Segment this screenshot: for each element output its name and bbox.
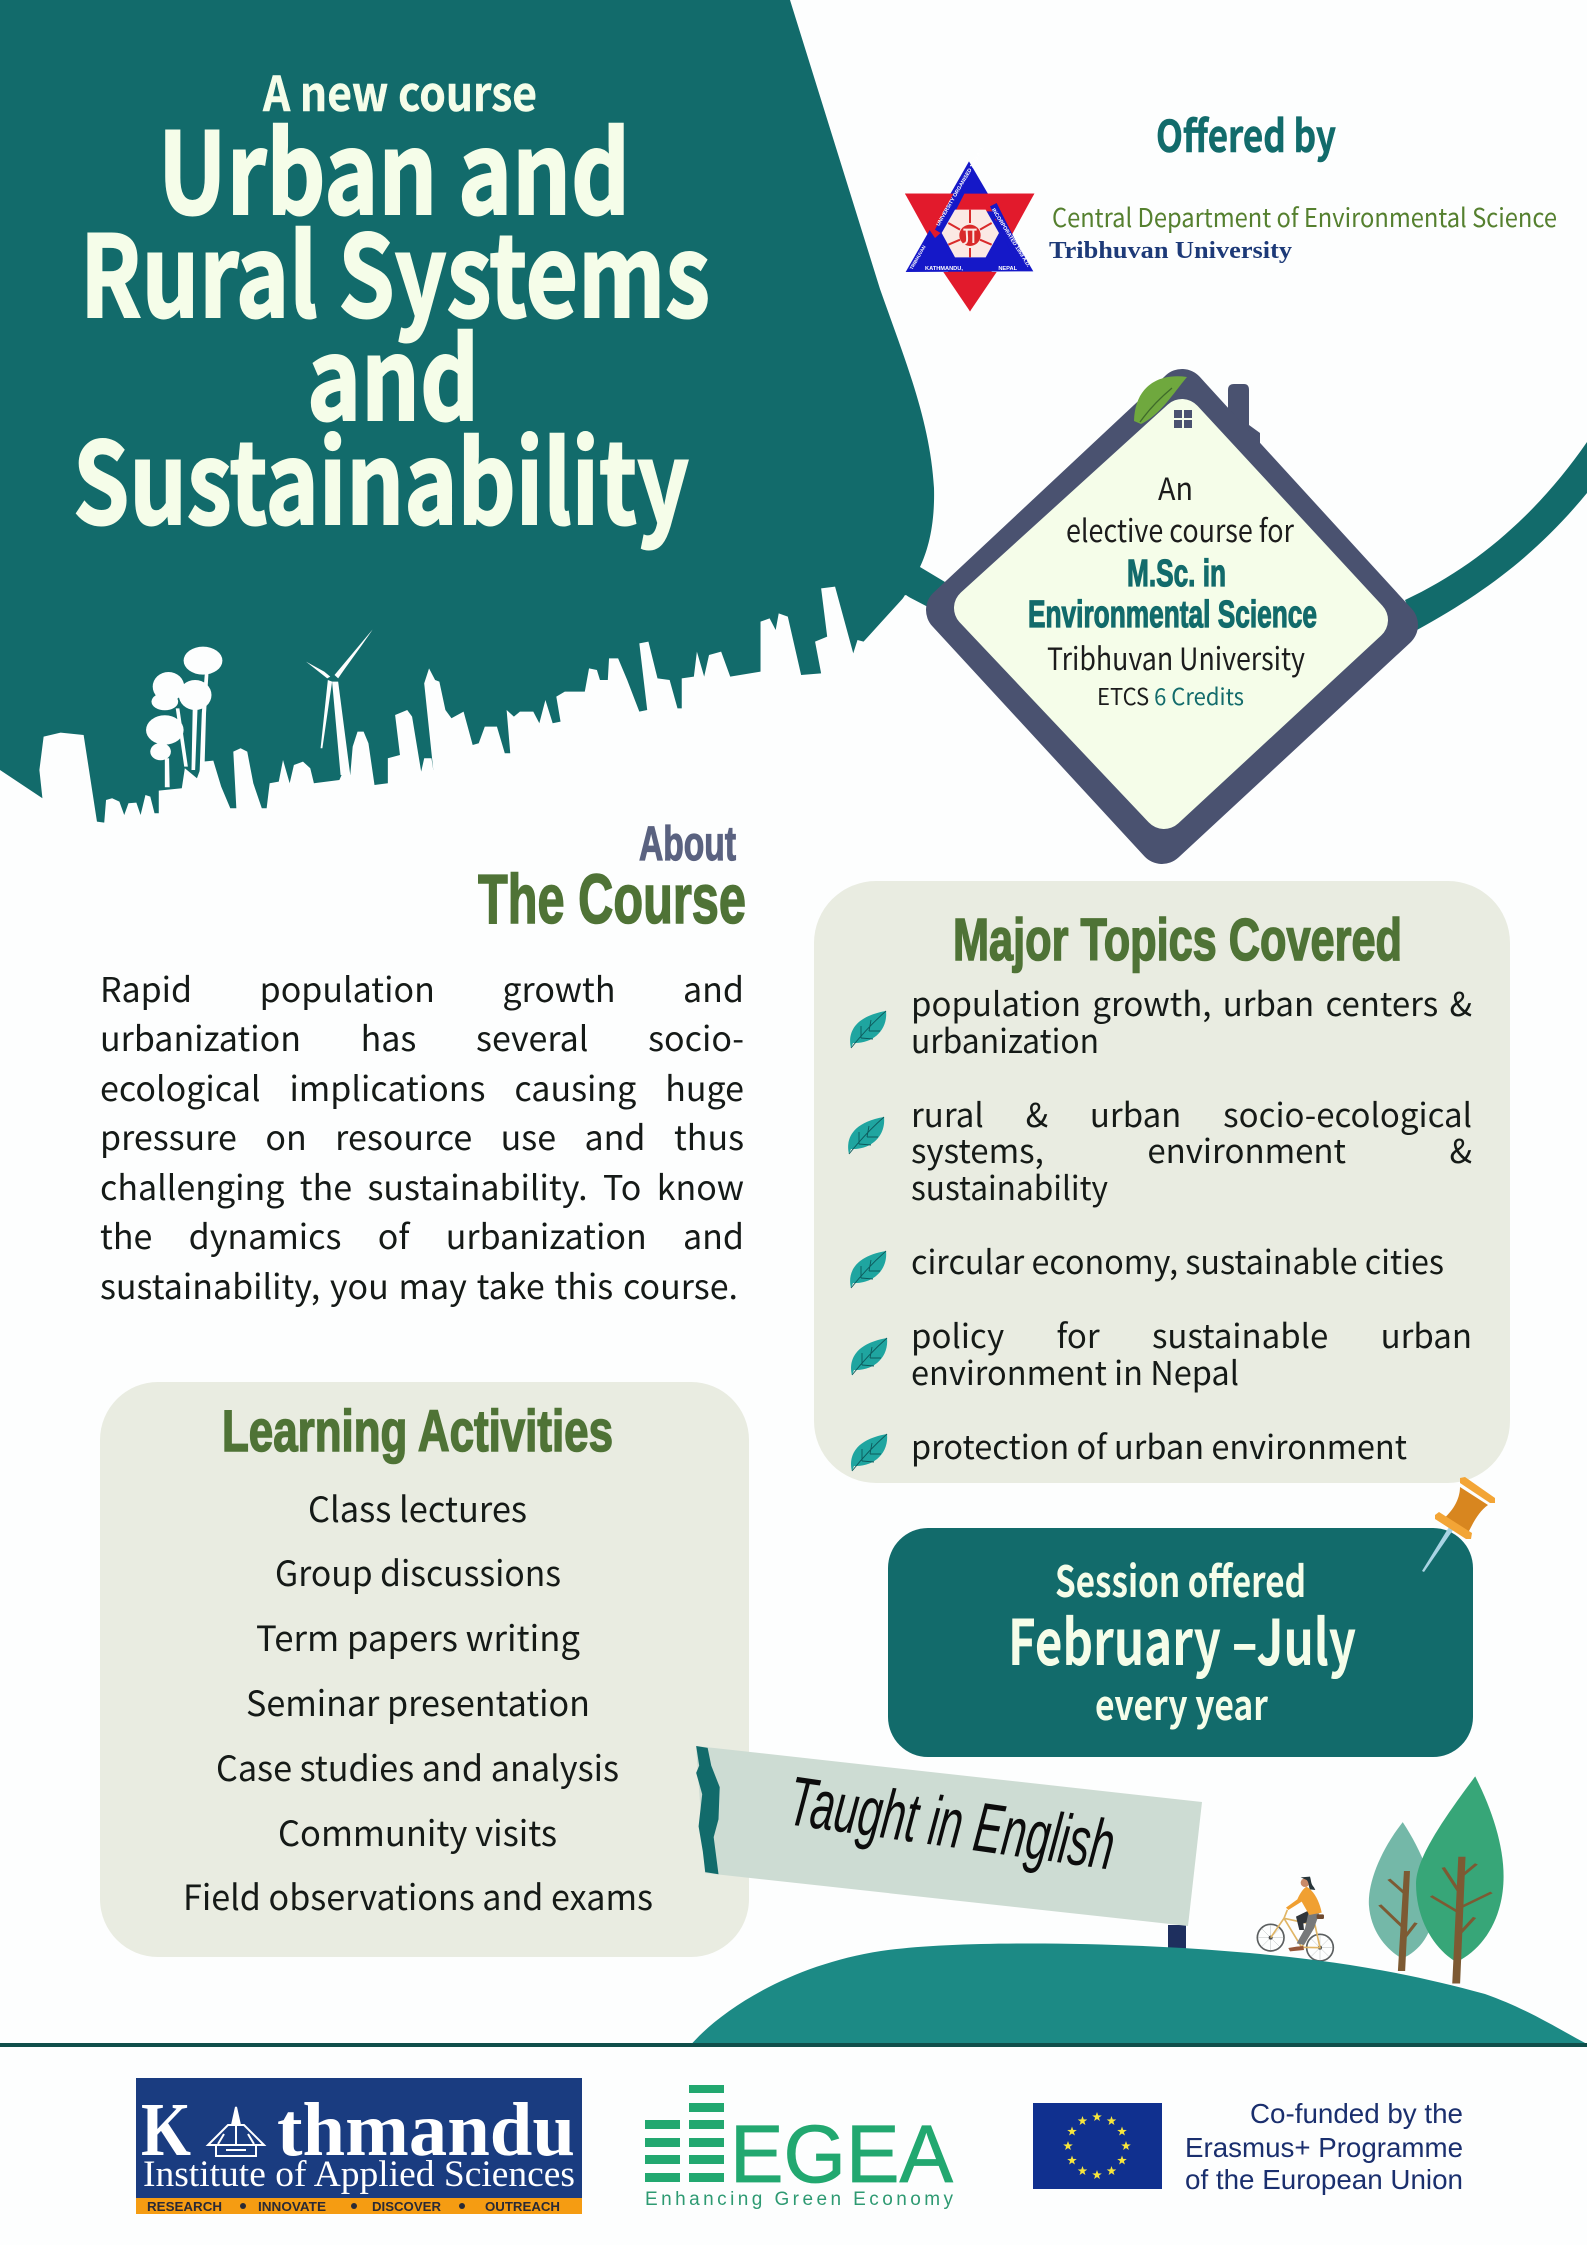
logo: Kathmandu Institute of Applied Sciences: K: [141, 2088, 191, 2172]
chimney: [1228, 384, 1260, 455]
logo: Kathmandu Institute of Applied Sciences: Institute of Applied Sciences: [143, 2154, 575, 2195]
session offered text: [1008, 1548, 1356, 1732]
leaf on roof: [1134, 376, 1187, 424]
learning activities list: [183, 1482, 653, 1921]
topic 1: urbanization: [911, 1015, 1099, 1063]
session offered text: Session offered: [1055, 1548, 1306, 1610]
leaf bullet 2: [848, 1117, 884, 1154]
house shaped badge: [950, 376, 1394, 840]
about the course paragraph: sustainability, you may take this course.: [100, 1260, 738, 1309]
icon: cyclist: [1257, 1877, 1333, 1961]
leaf bullet 3: [850, 1251, 886, 1288]
logo: Kathmandu Institute of Applied Sciences: RESEARCH: [147, 2200, 222, 2214]
Erasmus+ co-funding text: [1185, 2098, 1463, 2195]
badge text: [1028, 464, 1317, 712]
about the course paragraph: urbanization has several socio-: [100, 1012, 744, 1061]
panel: learning activities: [100, 1382, 749, 1957]
major topics heading: Major Topics Covered: [953, 907, 1402, 973]
Tribhuvan University logo: KATHMANDU,: [925, 266, 963, 272]
topic 3: circular economy, sustainable cities: [911, 1236, 1444, 1284]
logo: Kathmandu Institute of Applied Sciences: DISCOVER: [372, 2200, 441, 2214]
learning activities list: Seminar presentation: [246, 1676, 590, 1727]
title: Urban and: [158, 83, 630, 247]
roof window: [1174, 410, 1192, 428]
leaf bullet 4: [851, 1338, 887, 1375]
wind turbine: [306, 629, 373, 775]
topic 2: sustainability: [911, 1162, 1108, 1210]
footer rule: [0, 2043, 1587, 2047]
learning activities list: Case studies and analysis: [216, 1741, 619, 1792]
hill: [689, 1943, 1587, 2047]
panel: major topics: [814, 881, 1510, 1483]
Tribhuvan University logo: INCORPORATED 1959 A.D.: [990, 208, 1031, 269]
Tribhuvan University logo: [905, 145, 1034, 311]
topic 2: [911, 1089, 1472, 1210]
logo: Kathmandu Institute of Applied Sciences: OUTREACH: [485, 2200, 560, 2214]
house outline: [950, 393, 1394, 840]
topic 2: rural & urban socio-ecological: [911, 1089, 1472, 1137]
about the course paragraph: the dynamics of urbanization and: [100, 1210, 744, 1259]
trees: [1369, 1776, 1504, 1984]
Tribhuvan University logo: TRIBHUVAN: [909, 244, 927, 270]
the course heading: The Course: [478, 860, 746, 938]
logo: EGEA: EGEA: [730, 2109, 953, 2200]
learning activities heading: Learning Activities: [222, 1399, 613, 1464]
learning activities list: Class lectures: [308, 1482, 527, 1533]
topic 1: population growth, urban centers &: [911, 978, 1472, 1026]
topic 4: [911, 1310, 1472, 1395]
session offered text: every year: [1095, 1672, 1268, 1732]
logo: Kathmandu Institute of Applied Sciences: INNOVATE: [258, 2200, 326, 2214]
topic 1: [911, 978, 1472, 1063]
about the course paragraph: challenging the sustainability. To know: [100, 1161, 744, 1210]
logo: Kathmandu Institute of Applied Sciences: [136, 2078, 582, 2214]
leaf bullet 1: [850, 1011, 886, 1048]
topic 5: protection of urban environment: [911, 1421, 1407, 1469]
panel: session offered: [888, 1528, 1473, 1757]
learning activities list: Group discussions: [275, 1546, 561, 1597]
sign post: [1168, 1925, 1186, 1953]
sign: taught in English: Taught in English: [784, 1762, 1120, 1885]
badge text: ETCS 6 Credits: [1097, 678, 1244, 712]
bullet leaves: [848, 1011, 887, 1471]
about the course paragraph: ecological implications causing huge: [100, 1062, 744, 1111]
badge text: elective course for: [1066, 506, 1295, 551]
about small heading: About: [639, 818, 736, 871]
teal curve to the right of the house: [1405, 442, 1587, 630]
Erasmus+ co-funding text: Erasmus+ Programme: [1185, 2132, 1463, 2163]
title: [73, 55, 710, 557]
leaf bullet 5: [851, 1434, 887, 1471]
logo: EU flag: [1033, 2103, 1162, 2189]
university name: Tribhuvan University: [1049, 238, 1292, 264]
session offered text: February –July: [1008, 1593, 1356, 1684]
badge text: Environmental Science: [1028, 594, 1317, 636]
Erasmus+ co-funding text: of the European Union: [1185, 2164, 1463, 2195]
icon: push pin: [1422, 1477, 1495, 1572]
temple icon: [208, 2107, 264, 2156]
title: Sustainability: [73, 393, 689, 557]
about the course paragraph: pressure on resource use and thus: [100, 1111, 744, 1160]
offered by heading: Offered by: [1156, 101, 1336, 165]
sign: taught in English: [696, 1746, 1202, 1926]
trees: [146, 647, 222, 787]
learning activities list: Field observations and exams: [183, 1870, 653, 1921]
major topics list: [911, 978, 1472, 1469]
logo: EGEA: [645, 2085, 954, 2210]
learning activities list: Community visits: [278, 1806, 557, 1857]
topic 4: policy for sustainable urban: [911, 1310, 1472, 1358]
logo: EGEA: Enhancing Green Economy: [645, 2189, 954, 2210]
title: A new course: [262, 55, 537, 125]
Erasmus+ co-funding text: Co-funded by the: [1250, 2098, 1463, 2129]
badge text: M.Sc. in: [1127, 553, 1226, 595]
topic 4: environment in Nepal: [911, 1347, 1239, 1395]
Tribhuvan University logo: UNIVERSITY ORGANISED 1959 A.D.: [936, 145, 986, 227]
city skyline silhouette: [0, 587, 1030, 867]
badge text: Tribhuvan University: [1047, 634, 1305, 679]
Tribhuvan University logo: NEPAL: [998, 266, 1018, 272]
learning activities list: Term papers writing: [256, 1611, 580, 1662]
logo: Kathmandu Institute of Applied Sciences: thmandu: [277, 2088, 575, 2172]
title: and: [307, 289, 479, 453]
topic 2: systems, environment &: [911, 1125, 1472, 1173]
house interior: [975, 420, 1367, 808]
about the course paragraph: [100, 963, 744, 1309]
about the course paragraph: Rapid population growth and: [100, 963, 744, 1012]
badge text: An: [1158, 464, 1193, 509]
title: Rural Systems: [80, 186, 710, 350]
teal header shape: [0, 0, 945, 840]
